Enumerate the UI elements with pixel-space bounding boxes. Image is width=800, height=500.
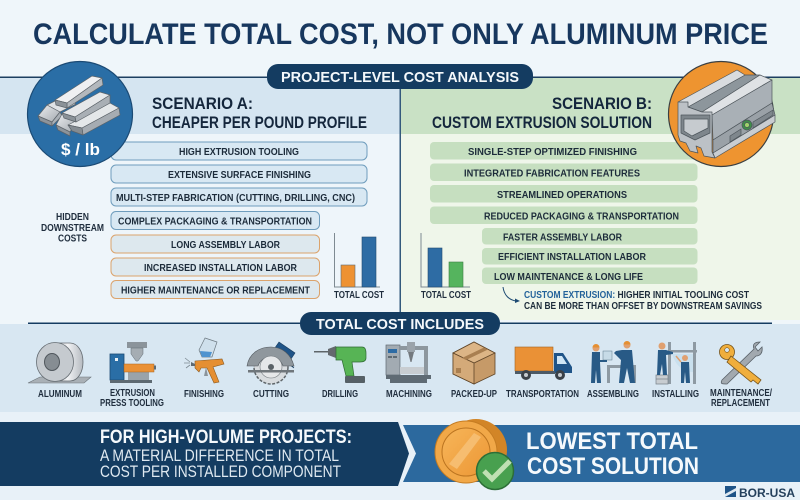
list: scenario A cost rows xyxy=(111,142,367,298)
band: for high-volume projects: COST PER INSTALLED COMPONENT xyxy=(100,462,341,481)
band: for high-volume projects xyxy=(0,422,409,486)
item: finishing xyxy=(184,338,224,400)
item: extrusion press tooling xyxy=(100,342,164,409)
list: scenario B benefit rows: LOW MAINTENANCE & LONG LIFE xyxy=(494,271,643,283)
heading: scenario B xyxy=(432,94,652,132)
item: packed-up xyxy=(451,342,497,400)
heading: scenario A: SCENARIO A: xyxy=(152,94,253,113)
list: scenario B benefit rows: EFFICIENT INSTALLATION LABOR xyxy=(498,251,646,263)
heading pill: project-level cost analysis xyxy=(267,64,533,89)
list: scenario B benefit rows: REDUCED PACKAGING & TRANSPORTATION xyxy=(484,210,679,222)
logo: BOR-USA xyxy=(725,486,795,500)
bar chart: scenario A total cost xyxy=(334,233,384,301)
text: lowest total cost solution: COST SOLUTION xyxy=(527,453,699,480)
item: maintenance / replacement xyxy=(710,342,772,409)
list: scenario B benefit rows: FASTER ASSEMBLY LABOR xyxy=(503,232,622,244)
list: scenario A cost rows: EXTENSIVE SURFACE FINISHING xyxy=(168,169,311,181)
item: aluminum xyxy=(28,342,91,400)
item: extrusion press tooling: EXTRUSION xyxy=(110,388,155,399)
heading: scenario B: SCENARIO B: xyxy=(552,94,652,113)
icon: extrusion profile xyxy=(678,70,775,158)
icon: ingot stack xyxy=(38,76,120,136)
top rule xyxy=(0,76,800,78)
item: installing xyxy=(652,342,699,400)
heading pill: project-level cost analysis: PROJECT-LEVEL COST ANALYSIS xyxy=(281,69,519,86)
item: packed-up: PACKED-UP xyxy=(451,389,497,400)
item: aluminum: ALUMINUM xyxy=(38,389,82,400)
list: scenario B benefit rows xyxy=(430,142,698,284)
item: maintenance / replacement: MAINTENANCE/ xyxy=(710,388,772,399)
item: assembling xyxy=(587,341,639,400)
band: for high-volume projects: A MATERIAL DIFFERENCE IN TOTAL xyxy=(100,446,339,465)
badge: aluminum ingots xyxy=(28,62,132,166)
heading: scenario A xyxy=(152,94,367,132)
bar chart: scenario B total cost: TOTAL COST xyxy=(421,290,471,301)
text: hidden downstream costs xyxy=(41,212,104,244)
callout: custom extrusion: CAN BE MORE THAN OFFSET BY DOWNSTREAM SAVINGS xyxy=(524,301,762,312)
item: drilling: DRILLING xyxy=(322,389,358,400)
callout: custom extrusion: CUSTOM EXTRUSION: HIGHER INITIAL TOOLING COST xyxy=(524,290,749,301)
item: cutting xyxy=(247,342,295,400)
arrow: to custom extrusion callout xyxy=(503,287,520,303)
heading pill: total cost includes: TOTAL COST INCLUDES xyxy=(316,316,484,333)
text: hidden downstream costs: DOWNSTREAM xyxy=(41,223,104,234)
text: hidden downstream costs: HIDDEN xyxy=(56,212,89,223)
text: lowest total cost solution xyxy=(526,428,699,480)
text: lowest total cost solution: LOWEST TOTAL xyxy=(526,428,698,455)
item: assembling: ASSEMBLING xyxy=(587,389,639,400)
bar chart: scenario A total cost: TOTAL COST xyxy=(334,290,384,301)
item: installing: INSTALLING xyxy=(652,389,699,400)
badge: aluminum ingots: $ / lb xyxy=(61,140,100,159)
bar chart: scenario B total cost xyxy=(421,233,471,301)
logo: BOR-USA: BOR-USA xyxy=(739,488,795,500)
list: scenario B benefit rows: SINGLE-STEP OPTIMIZED FINISHING xyxy=(468,146,637,158)
list: scenario B benefit rows: STREAMLINED OPERATIONS xyxy=(497,189,627,201)
band: for high-volume projects: FOR HIGH-VOLUME PROJECTS: xyxy=(100,427,352,448)
list: scenario A cost rows: MULTI-STEP FABRICATION (CUTTING, DRILLING, CNC) xyxy=(116,192,355,204)
list: scenario A cost rows: COMPLEX PACKAGING & TRANSPORTATION xyxy=(118,216,312,228)
heading: scenario B: CUSTOM EXTRUSION SOLUTION xyxy=(432,113,652,132)
centre divider xyxy=(400,88,401,320)
item: maintenance / replacement: REPLACEMENT xyxy=(711,398,770,409)
badge: custom extrusion profile xyxy=(668,62,775,166)
panel: scenario A xyxy=(0,78,400,320)
item: machining: MACHINING xyxy=(386,389,432,400)
icon: coin with check xyxy=(435,419,514,490)
heading: scenario A: CHEAPER PER POUND PROFILE xyxy=(152,113,367,132)
item: transportation: TRANSPORTATION xyxy=(506,389,579,400)
panel: total cost includes xyxy=(0,312,800,412)
band: lowest total cost solution xyxy=(403,419,800,490)
list: scenario A cost rows: HIGHER MAINTENANCE OR REPLACEMENT xyxy=(121,284,310,296)
list: scenario A cost rows: HIGH EXTRUSION TOOLING xyxy=(179,146,299,158)
item: extrusion press tooling: PRESS TOOLING xyxy=(100,398,164,409)
list: scenario A cost rows: LONG ASSEMBLY LABOR xyxy=(171,239,280,251)
item: transportation xyxy=(506,347,579,400)
heading pill: total cost includes xyxy=(300,312,500,335)
panel: scenario B xyxy=(400,78,800,320)
list: scenario B benefit rows: INTEGRATED FABRICATION FEATURES xyxy=(464,168,640,180)
item: cutting: CUTTING xyxy=(253,389,289,400)
list: scenario A cost rows: INCREASED INSTALLATION LABOR xyxy=(144,262,297,274)
item: finishing: FINISHING xyxy=(184,389,224,400)
item: machining xyxy=(386,342,432,400)
item: drilling xyxy=(314,346,366,400)
callout: custom extrusion xyxy=(524,290,762,312)
text: hidden downstream costs: COSTS xyxy=(58,234,87,244)
